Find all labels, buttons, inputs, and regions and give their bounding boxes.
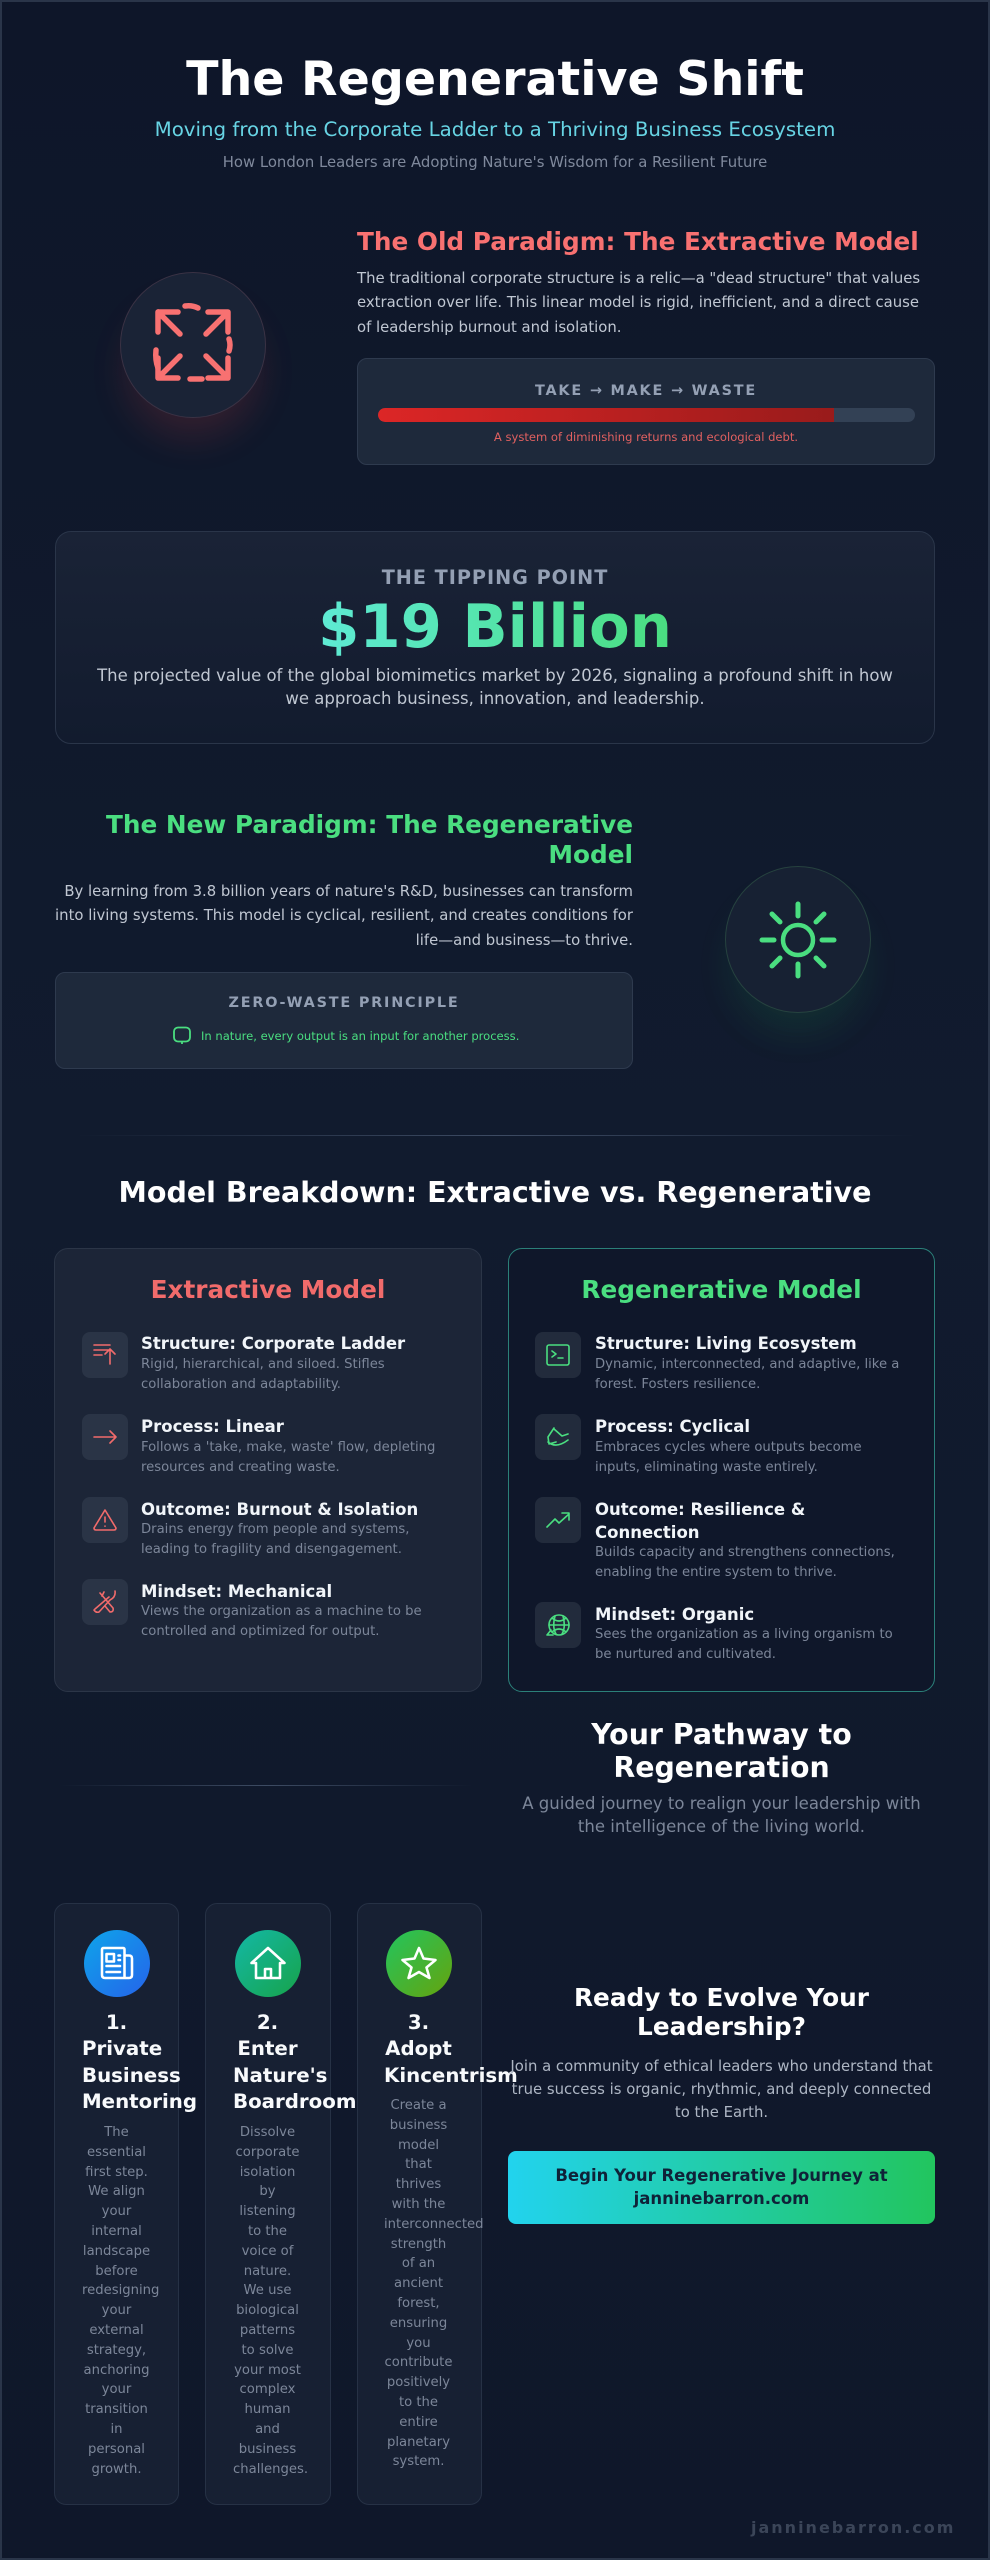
text: pathway: the intelligence of the living world. bbox=[578, 1817, 865, 1836]
stat: 19 billion: $19 Billion bbox=[318, 592, 672, 661]
divider bbox=[60, 1785, 472, 1786]
button: call to action bbox=[508, 2151, 935, 2224]
text: corporate ladder: collaboration and adaptability. bbox=[141, 1377, 341, 1392]
text: corporate ladder bbox=[141, 1357, 385, 1392]
caption: A system of diminishing returns and ecological debt. bbox=[494, 430, 798, 444]
icon: new paradigm sun bbox=[725, 866, 871, 1013]
text: step 2: Dissolve corporate isolation by listening to the voice of nature. We use biological patterns to solve your most complex human and business challenges. bbox=[233, 2125, 308, 2477]
heading: step 1: Private Business Mentoring bbox=[82, 2037, 197, 2113]
text: corporate ladder: Rigid, hierarchical, and siloed. Stifles bbox=[141, 1357, 385, 1372]
text: new paradigm bbox=[55, 882, 633, 949]
icon: warning bbox=[82, 1497, 128, 1543]
text: new paradigm: life—and business—to thrive. bbox=[416, 931, 633, 949]
text: tipping point: we approach business, innovation, and leadership. bbox=[285, 689, 705, 708]
button: call to action: Begin Your Regenerative Journey at bbox=[555, 2166, 888, 2185]
title: The Regenerative Shift bbox=[186, 52, 804, 107]
item: linear: Process: Linear bbox=[141, 1417, 284, 1436]
text: old paradigm bbox=[356, 269, 920, 336]
heading: call to action: Leadership? bbox=[637, 2012, 806, 2041]
icon: chat bbox=[173, 1026, 191, 1044]
heading: step 3: 3. bbox=[408, 2011, 429, 2034]
text: resilience: Builds capacity and strengthens connections, bbox=[595, 1545, 895, 1560]
text: call to action: to the Earth. bbox=[675, 2103, 768, 2121]
panel: step 3 bbox=[357, 1903, 482, 2505]
text: cyclical bbox=[595, 1440, 862, 1475]
text: zero waste: In nature, every output is an input for another process. bbox=[201, 1029, 519, 1043]
heading: call to action: Ready to Evolve Your bbox=[574, 1983, 869, 2012]
heading: new paradigm: The New Paradigm: The Regenerative bbox=[106, 810, 633, 839]
text: linear: resources and creating waste. bbox=[141, 1460, 340, 1475]
panel: take make waste bbox=[357, 358, 935, 465]
panel: zero waste bbox=[55, 972, 633, 1069]
heading: call to action bbox=[574, 1983, 869, 2041]
heading: step 3: Adopt Kincentrism bbox=[384, 2037, 518, 2087]
text: mechanical: Views the organization as a machine to be bbox=[141, 1604, 422, 1619]
text: old paradigm: The traditional corporate structure is a relic—a "dead structure" that values bbox=[357, 269, 920, 287]
text: new paradigm: By learning from 3.8 billion years of nature's R&D, businesses can transform bbox=[64, 882, 633, 900]
text: living ecosystem: Dynamic, interconnected, and adaptive, like a bbox=[595, 1357, 899, 1372]
text: call to action: true success is organic, rhythmic, and deeply connected bbox=[512, 2080, 931, 2098]
text: mechanical: controlled and optimized for output. bbox=[141, 1624, 379, 1639]
text: mechanical bbox=[141, 1604, 422, 1639]
icon: house bbox=[235, 1930, 301, 1997]
heading: step 3 bbox=[384, 2011, 518, 2087]
text: organic: be nurtured and cultivated. bbox=[595, 1647, 776, 1662]
item: organic: Mindset: Organic bbox=[595, 1605, 754, 1624]
text: call to action bbox=[510, 2057, 933, 2121]
icon: arrow right bbox=[82, 1414, 128, 1460]
text: burnout: leading to fragility and disengagement. bbox=[141, 1542, 402, 1557]
text: pathway bbox=[522, 1794, 921, 1836]
text: burnout bbox=[141, 1522, 409, 1557]
heading: step 1: 1. bbox=[106, 2011, 127, 2034]
panel: step 2 bbox=[205, 1903, 331, 2505]
text: resilience: enabling the entire system to thrive. bbox=[595, 1565, 837, 1580]
heading: old paradigm: The Old Paradigm: The Extractive Model bbox=[357, 227, 919, 256]
text: step 3: Create a business model that thrives with the interconnected strength of an ancient forest, ensuring you contribute positively to the entire planetary system. bbox=[384, 2098, 484, 2469]
panel: extractive model bbox=[54, 1248, 482, 1692]
icon: old paradigm circle bbox=[120, 272, 266, 418]
footer: website: janninebarron.com bbox=[751, 2518, 955, 2537]
text: old paradigm: extraction over life. This linear model is rigid, inefficient, and a direct cause bbox=[357, 293, 919, 311]
text: old paradigm: of leadership burnout and isolation. bbox=[357, 318, 622, 336]
button: call to action: janninebarron.com bbox=[634, 2189, 809, 2208]
icon: newspaper bbox=[84, 1930, 150, 1997]
text: living ecosystem: forest. Fosters resilience. bbox=[595, 1377, 760, 1392]
text: call to action: Join a community of ethical leaders who understand that bbox=[510, 2057, 933, 2075]
text: linear: Follows a 'take, make, waste' flow, depleting bbox=[141, 1440, 435, 1455]
text: cyclical: inputs, eliminating waste entirely. bbox=[595, 1460, 818, 1475]
item: resilience bbox=[595, 1500, 805, 1542]
text: linear bbox=[141, 1440, 435, 1475]
heading: step 2: 2. bbox=[257, 2011, 278, 2034]
text: pathway: A guided journey to realign your leadership with bbox=[522, 1794, 921, 1813]
item: mechanical: Mindset: Mechanical bbox=[141, 1582, 332, 1601]
icon: cycle bbox=[535, 1414, 581, 1460]
heading: pathway bbox=[591, 1718, 852, 1784]
text: new paradigm: into living systems. This model is cyclical, resilient, and creates conditions for bbox=[55, 906, 633, 924]
text: resilience bbox=[595, 1545, 895, 1580]
panel: step 1 bbox=[54, 1903, 179, 2505]
panel: regenerative model bbox=[508, 1248, 935, 1692]
heading: pathway: Regeneration bbox=[613, 1751, 830, 1784]
item: resilience: Connection bbox=[595, 1523, 700, 1542]
icon: sort up bbox=[82, 1332, 128, 1378]
panel: tipping point bbox=[55, 531, 935, 744]
item: living ecosystem: Structure: Living Ecosystem bbox=[595, 1334, 857, 1353]
tagline: How London Leaders are Adopting Nature's Wisdom for a Resilient Future bbox=[223, 153, 767, 171]
text: cyclical: Embraces cycles where outputs become bbox=[595, 1440, 862, 1455]
label: take make waste: TAKE → MAKE → WASTE bbox=[535, 383, 757, 399]
bar: diminishing returns bbox=[378, 408, 915, 422]
icon: star bbox=[386, 1930, 452, 1997]
subtitle: Moving from the Corporate Ladder to a Thriving Business Ecosystem bbox=[155, 118, 835, 141]
heading: extractive: Extractive Model bbox=[151, 1275, 385, 1304]
icon: terminal bbox=[535, 1332, 581, 1378]
text: living ecosystem bbox=[595, 1357, 899, 1392]
heading: new paradigm bbox=[106, 810, 633, 869]
item: corporate ladder: Structure: Corporate Ladder bbox=[141, 1334, 405, 1353]
text: burnout: Drains energy from people and systems, bbox=[141, 1522, 409, 1537]
heading: new paradigm: Model bbox=[548, 840, 633, 869]
text: organic bbox=[595, 1627, 893, 1662]
icon: tools bbox=[82, 1579, 128, 1625]
icon: globe bbox=[535, 1602, 581, 1648]
label: zero waste: ZERO-WASTE PRINCIPLE bbox=[228, 995, 460, 1011]
label: tipping point: THE TIPPING POINT bbox=[382, 566, 608, 589]
heading: regenerative: Regenerative Model bbox=[581, 1275, 862, 1304]
item: burnout: Outcome: Burnout & Isolation bbox=[141, 1500, 418, 1519]
text: step 1: The essential first step. We align your internal landscape before redesigning your external strategy, anchoring your transition in personal growth. bbox=[82, 2125, 159, 2477]
divider bbox=[76, 1135, 916, 1136]
item: resilience: Outcome: Resilience & bbox=[595, 1500, 805, 1519]
item: cyclical: Process: Cyclical bbox=[595, 1417, 750, 1436]
text: tipping point bbox=[97, 666, 893, 708]
heading: step 2: Enter Nature's Boardroom bbox=[233, 2037, 356, 2113]
text: organic: Sees the organization as a living organism to bbox=[595, 1627, 893, 1642]
heading: pathway: Your Pathway to bbox=[591, 1718, 852, 1751]
heading: model breakdown: Model Breakdown: Extractive vs. Regenerative bbox=[119, 1176, 871, 1209]
text: tipping point: The projected value of the global biomimetics market by 2026, signaling a profound shift in how bbox=[97, 666, 893, 685]
icon: trending up bbox=[535, 1497, 581, 1543]
